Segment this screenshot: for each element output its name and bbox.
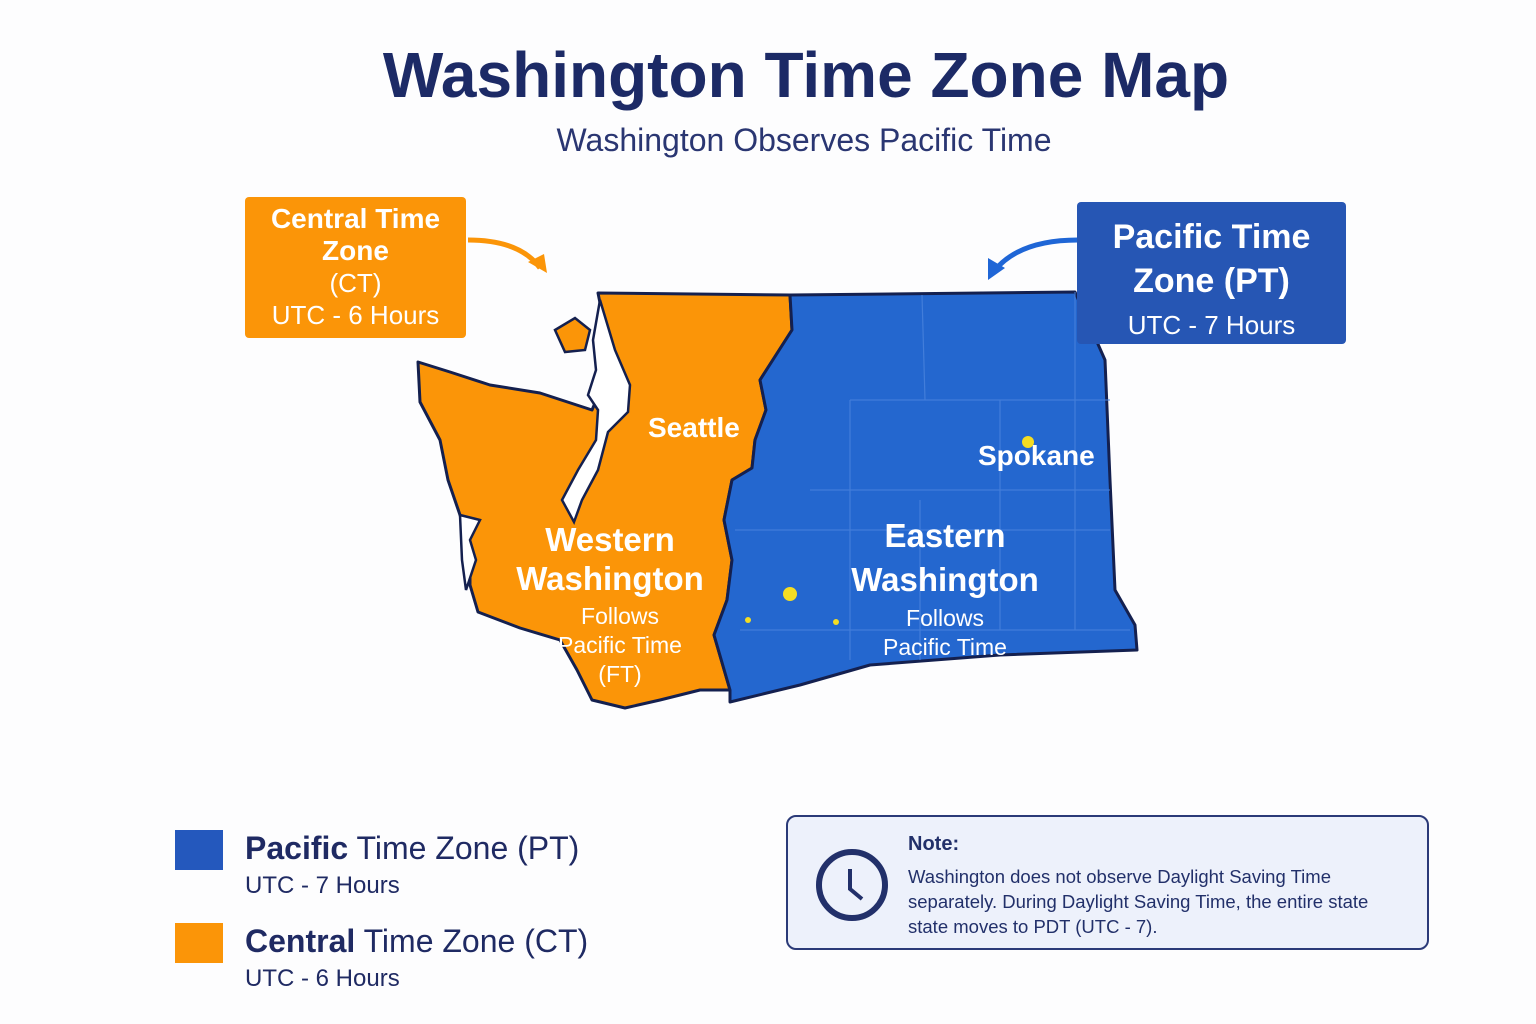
- legend item: pacific: UTC - 7 Hours: [245, 872, 400, 899]
- callout: pacific time: [1077, 202, 1346, 344]
- note text: Washington does not observe Daylight Saving Time: [908, 866, 1331, 887]
- subtitle: Washington Observes Pacific Time: [556, 122, 1052, 158]
- callout: central time: Central Time: [271, 203, 440, 234]
- note text: state moves to PDT (UTC - 7).: [908, 916, 1157, 937]
- arrow: pacific callout: [988, 240, 1078, 280]
- icon: clock: [816, 849, 888, 921]
- legend item: pacific: [175, 830, 579, 899]
- label: eastern washington: [851, 517, 1039, 660]
- region: western washington: [418, 293, 792, 708]
- legend: [175, 830, 588, 992]
- label: eastern washington: Eastern: [884, 517, 1006, 554]
- label: western washington: Pacific Time: [558, 632, 682, 658]
- note text: [908, 833, 1368, 937]
- note box: [786, 815, 1429, 950]
- legend item: central: Central Time Zone (CT): [245, 923, 588, 959]
- label: eastern washington: Follows: [906, 605, 984, 631]
- legend item: central: UTC - 6 Hours: [245, 965, 400, 992]
- label: western washington: Follows: [581, 603, 659, 629]
- note text: Note:: [908, 833, 959, 855]
- map labels: Seattle: [648, 412, 740, 443]
- callout: central time: [245, 197, 466, 338]
- label: western washington: Washington: [516, 560, 704, 597]
- city dots: [1022, 436, 1034, 448]
- label: eastern washington: Pacific Time: [883, 634, 1007, 660]
- callout: central time: (CT): [330, 268, 381, 298]
- label: eastern washington: Washington: [851, 561, 1039, 598]
- legend item: central: [175, 923, 588, 992]
- legend item: pacific: Pacific Time Zone (PT): [245, 830, 579, 866]
- title: Washington Time Zone Map: [383, 39, 1229, 111]
- callout: pacific time: Zone (PT): [1133, 262, 1290, 300]
- label: western washington: [516, 521, 704, 687]
- callout: central time: Zone: [322, 235, 389, 266]
- region: eastern washington: [714, 292, 1137, 702]
- callout: central time: UTC - 6 Hours: [272, 300, 439, 330]
- callout: pacific time: UTC - 7 Hours: [1128, 310, 1295, 340]
- arrow: central callout: [468, 240, 547, 273]
- label: western washington: Western: [545, 521, 675, 558]
- note text: separately. During Daylight Saving Time, the entire state: [908, 891, 1368, 912]
- label: western washington: (FT): [598, 661, 642, 687]
- text: Spokane: [978, 440, 1095, 471]
- callout: pacific time: Pacific Time: [1113, 218, 1310, 256]
